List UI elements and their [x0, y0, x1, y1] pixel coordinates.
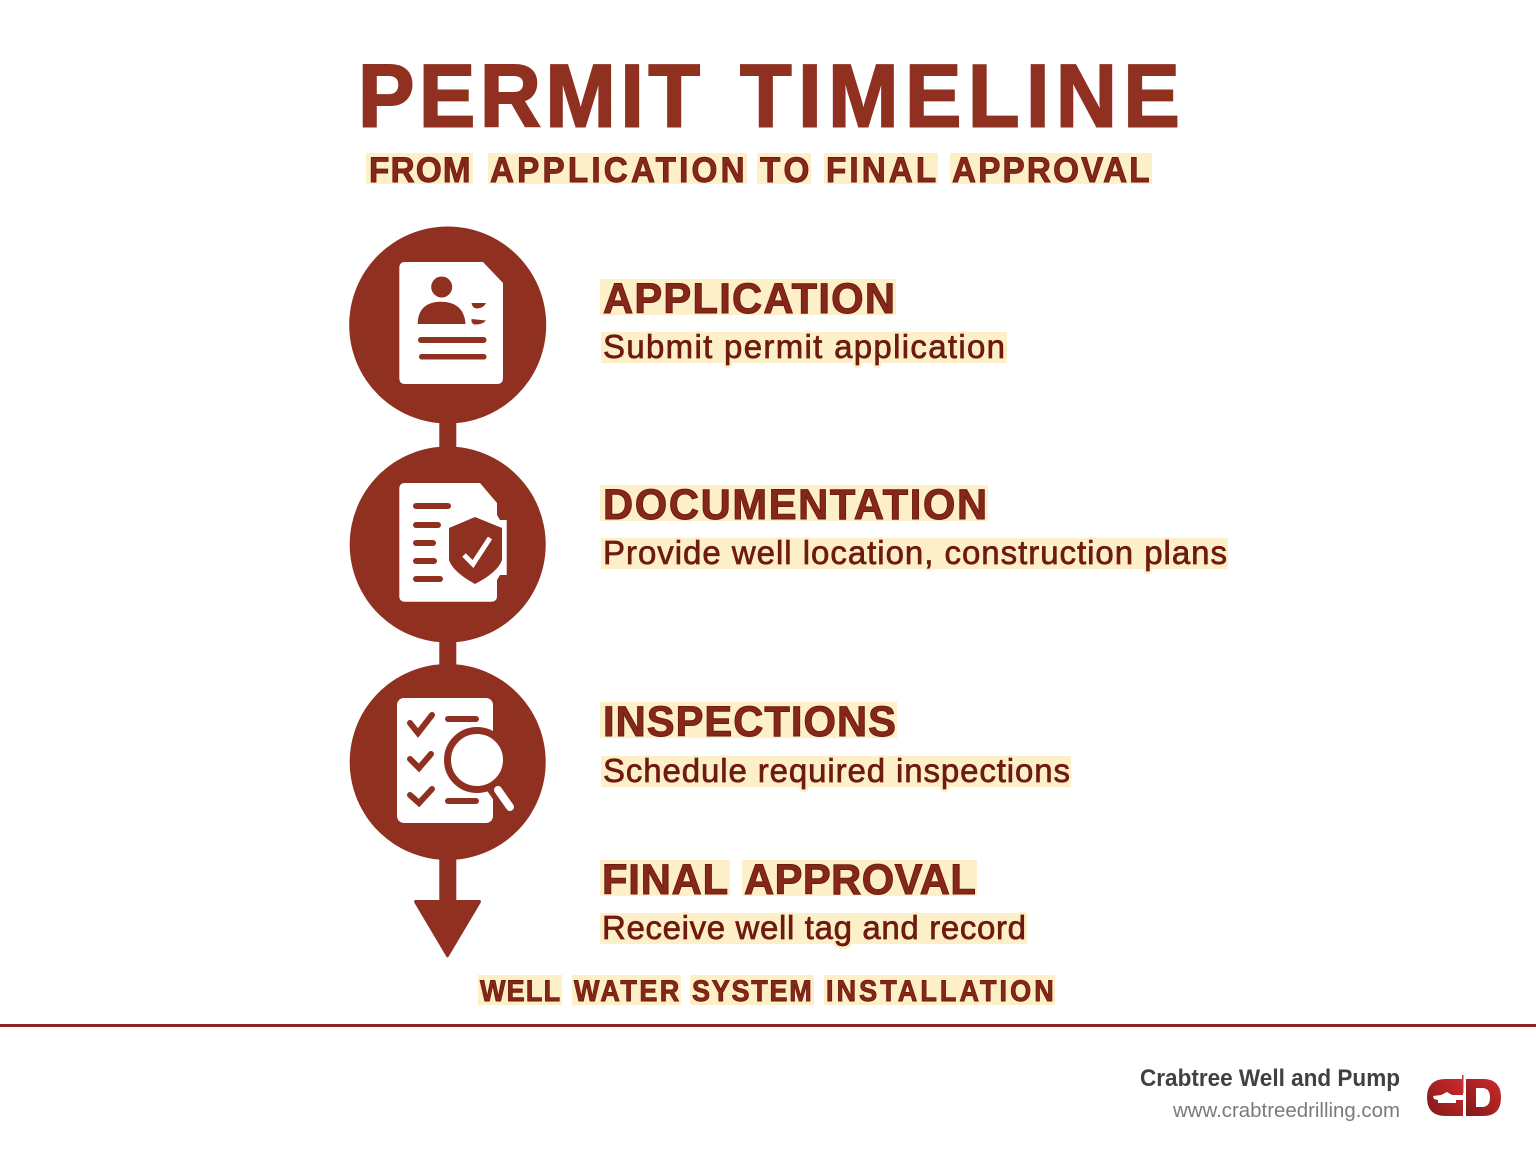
- subtitle: APPLICATION: [490, 151, 745, 190]
- title: PERMIT: [358, 47, 700, 146]
- step: inspections: [600, 697, 1071, 789]
- caption: WATER: [574, 975, 680, 1008]
- icon: inspection checklist with magnifier: [350, 664, 546, 860]
- footer company name: Crabtree Well and Pump: [1140, 1065, 1400, 1092]
- logo: [1427, 1075, 1501, 1116]
- icon: documentation with shield: [350, 446, 546, 642]
- caption: INSTALLATION: [826, 975, 1054, 1008]
- caption: [478, 975, 1055, 1008]
- step: documentation: Provide well location, construction plans: [603, 534, 1227, 571]
- step: final approval: Receive well tag and record: [602, 909, 1026, 946]
- subtitle: TO: [760, 151, 809, 190]
- step: documentation: [600, 480, 1228, 571]
- step: documentation: DOCUMENTATION: [603, 480, 987, 528]
- step: final approval: FINAL: [602, 855, 728, 903]
- step: inspections: INSPECTIONS: [603, 697, 896, 745]
- step: inspections: Schedule required inspections: [603, 752, 1070, 789]
- subtitle: FINAL: [826, 151, 936, 190]
- title: [358, 47, 1180, 146]
- subtitle: [366, 151, 1152, 190]
- step: application: APPLICATION: [603, 274, 895, 322]
- subtitle: FROM: [369, 151, 471, 190]
- step: final approval: APPROVAL: [744, 855, 976, 903]
- caption: WELL: [480, 975, 560, 1008]
- timeline connector and arrow: [414, 420, 481, 958]
- step: application: Submit permit application: [603, 328, 1005, 365]
- subtitle: APPROVAL: [952, 151, 1150, 190]
- step: documentation: Provide well location, construction plans: [603, 534, 1227, 571]
- footer divider: [0, 1024, 1536, 1027]
- step: application: [600, 274, 1007, 365]
- title: TIMELINE: [740, 47, 1180, 146]
- icon: application document: [349, 226, 546, 424]
- caption: SYSTEM: [692, 975, 812, 1008]
- step: final approval: [600, 855, 1027, 946]
- step: final approval: Receive well tag and record: [602, 909, 1026, 946]
- footer website: www.crabtreedrilling.com: [1172, 1099, 1400, 1122]
- step: application: Submit permit application: [603, 328, 1005, 365]
- step: inspections: Schedule required inspections: [603, 752, 1070, 789]
